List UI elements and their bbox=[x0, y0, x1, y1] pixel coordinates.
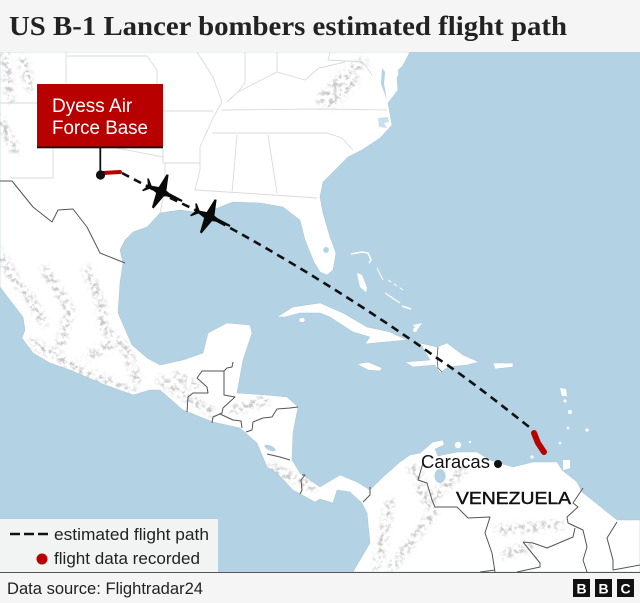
map: terrain relief bbox=[0, 55, 560, 567]
legend bbox=[0, 519, 218, 572]
map: inland water bbox=[264, 66, 446, 483]
flight path: recorded data at start bbox=[103, 172, 120, 173]
callout: Dyess Air Force Base: Force Base bbox=[52, 118, 148, 139]
icon: bomber aircraft 2 bbox=[185, 192, 238, 243]
map: international borders bbox=[0, 181, 640, 572]
logo: BBC: C bbox=[620, 580, 631, 596]
source text: Data source: Flightradar24 bbox=[7, 580, 203, 598]
islands: Bahamas and Antilles bbox=[351, 252, 589, 470]
icon: bomber aircraft 1 bbox=[137, 167, 190, 218]
logo: BBC: B bbox=[576, 580, 587, 596]
borders: South America bbox=[363, 463, 640, 572]
legend: estimated flight path: estimated flight path bbox=[54, 525, 209, 544]
borders: Central America bbox=[187, 362, 305, 494]
callout: Dyess Air Force Base: Dyess Air bbox=[52, 96, 133, 117]
title bar bbox=[0, 0, 640, 52]
border: US and Mexico bbox=[0, 181, 125, 263]
footer bbox=[0, 572, 640, 603]
map label: Venezuela: VENEZUELA bbox=[456, 488, 571, 508]
island: Hispaniola bbox=[405, 343, 479, 373]
logo: BBC: B bbox=[598, 580, 609, 596]
legend: flight data recorded: flight data recorded bbox=[54, 549, 200, 568]
map label: Caracas: Caracas bbox=[421, 451, 490, 472]
title: US B-1 Lancer bombers estimated flight path bbox=[9, 11, 567, 41]
logo: BBC bbox=[573, 579, 634, 597]
callout: Dyess Air Force Base bbox=[37, 84, 163, 180]
island: Puerto Rico bbox=[493, 363, 513, 369]
flight path: estimated dashed route bbox=[122, 173, 533, 430]
flight path: recorded data near Venezuela bbox=[534, 433, 544, 452]
island: Cuba bbox=[277, 303, 407, 344]
island: Jamaica bbox=[357, 362, 382, 371]
map: US state borders bbox=[0, 52, 387, 213]
